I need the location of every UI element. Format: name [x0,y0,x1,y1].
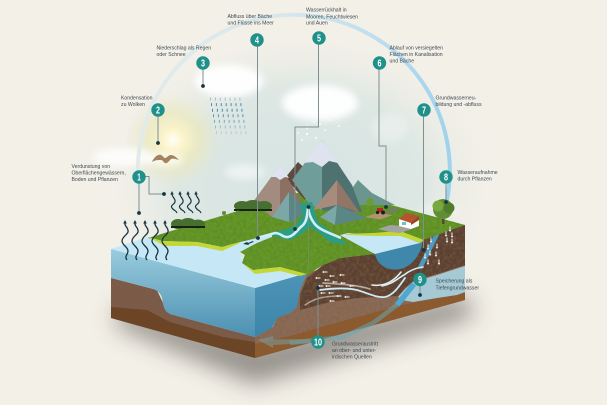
right lower soil [255,225,465,358]
marker 3 [196,56,210,70]
left mountain snow [271,165,289,180]
label 7: bildung und -abfluss [436,102,482,108]
marker 4 [250,33,264,47]
groundwater streams [305,267,423,305]
water channel lower [397,284,414,305]
river banks [272,202,348,245]
back dark peak [285,162,312,200]
water right face [255,273,307,337]
tractor [376,208,385,214]
underground flow arrows [315,226,453,302]
marker 10: 10 [314,338,322,349]
water channel [420,226,441,268]
marker 5 [312,31,326,45]
lake surface [340,235,420,254]
house [399,213,419,229]
label 3: oder Schnee [156,52,186,58]
field [365,213,393,220]
label 4: Abfluss über Bäche [228,14,272,20]
mountains [253,140,395,225]
marker 3: 3 [201,59,205,70]
label 1: Verdunstung von [72,164,110,170]
water left face [111,249,255,337]
marker 5: 5 [317,34,321,45]
icon: bird [152,155,179,163]
left teal pyramid [272,192,289,222]
bush back [222,200,272,216]
label 2: zu Wolken [121,102,145,108]
label 10: irdischen Quellen [332,355,372,361]
label 6: Flächen in Kanalisation [390,52,443,58]
label 7: Grundwasserneu- [436,96,476,102]
bushes [171,200,272,229]
label 6: und Bäche [390,59,414,65]
spring arrow [258,336,310,348]
block shadow [115,295,475,384]
3D landscape block [111,186,465,358]
front brown pyramid [313,180,337,210]
marker 8 [439,170,453,184]
small tree [366,198,374,206]
front teal pyramid [320,205,337,225]
deep water channel [290,305,397,343]
big mountain [292,140,322,210]
marker 9: 9 [418,275,422,286]
marker 2: 2 [156,106,160,117]
rain [210,99,250,133]
label 8: durch Pflanzen [458,176,492,182]
left bottom soil layer [111,307,255,358]
marker 7: 7 [422,106,426,117]
river [257,208,341,238]
road [385,208,397,213]
marker 7 [417,103,431,117]
label 2: Kondensation [121,96,152,102]
groundwater reservoir [398,266,465,302]
marker 6 [373,56,386,70]
left mountain [253,165,280,217]
arrow in river [243,241,254,245]
small teal mountain [340,180,395,205]
label 5: und Auen [306,21,328,27]
marker 10 [311,335,325,349]
lake face [375,240,423,269]
label 1: Oberflächengewässern, [72,170,126,176]
leader lines [137,38,448,342]
parking area [378,225,412,233]
shore [148,231,424,276]
evaporation squiggles upper [170,191,201,213]
label 5: Wasserrückhalt in [306,8,347,14]
bush left [171,218,205,229]
label 8: Wasseraufnahme [458,170,498,176]
number markers [132,31,453,349]
arc of the water cycle [138,15,450,205]
label 5: Mooren, Feuchtwiesen [306,14,358,20]
tree [432,199,454,224]
land surface [148,186,465,275]
big mountain snow [304,140,338,167]
background glow [95,25,505,345]
label 9: Tiefengrundwasser [436,285,479,291]
label 4: und Flüsse ins Meer [228,21,274,27]
label 1: Boden und Pflanzen [72,177,118,183]
marker 6: 6 [378,59,382,70]
labels [72,8,498,361]
marker 2 [151,103,165,117]
dark soil [300,225,465,310]
evaporation squiggles left [122,220,168,260]
label 10: Grundwasseraustritt [332,341,378,347]
clouds [93,65,460,218]
left lower soil [111,278,255,358]
marker 8: 8 [444,173,448,184]
marker 4: 4 [255,36,259,47]
river system [243,202,348,245]
sun [125,92,221,188]
marker 1 [132,170,146,184]
label 6: Ablauf von versiegelten [390,46,443,52]
label 9: Speicherung als [436,279,472,285]
label 3: Niederschlag als Regen [156,46,211,52]
right bottom soil layer [255,293,465,358]
marker 9 [413,273,427,286]
marker 1: 1 [137,173,141,184]
label 10: an ober- und unter- [332,348,376,354]
snow dots [297,119,340,141]
water surface [111,233,307,288]
